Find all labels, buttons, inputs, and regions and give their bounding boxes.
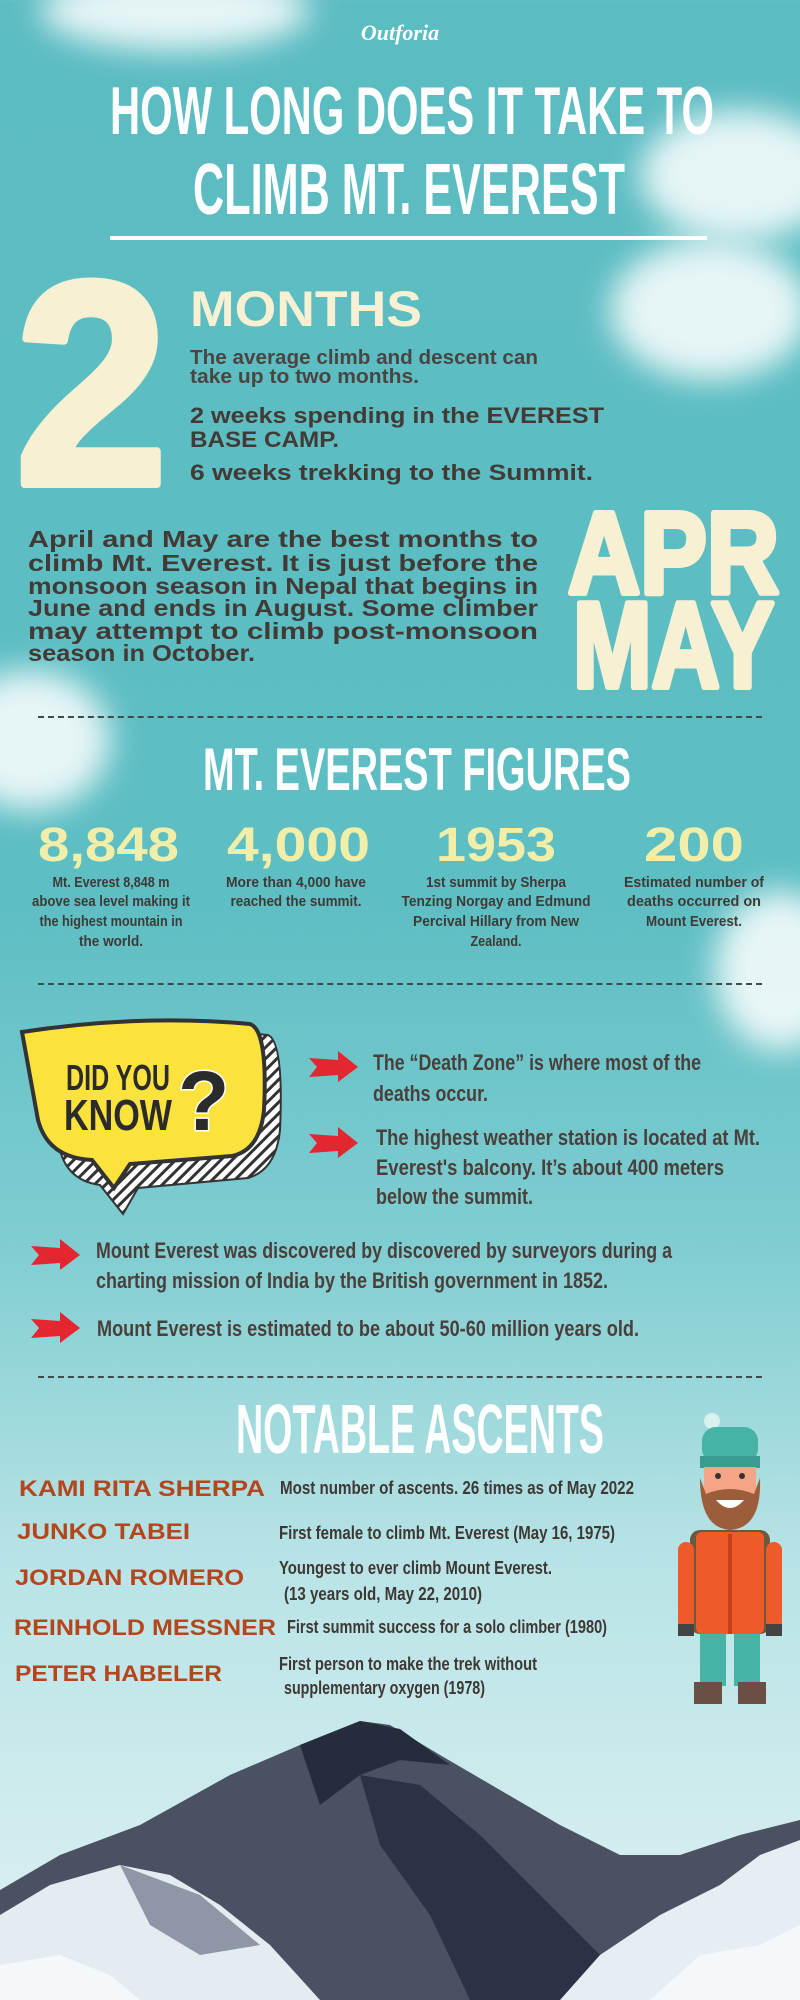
ascents list: KAMI RITA SHERPA — [19, 1476, 265, 1501]
logo: Outforia — [361, 20, 439, 45]
figures: More than 4,000 have — [226, 874, 366, 891]
bullets: below the summit. — [376, 1184, 533, 1209]
ascents list: First person to make the trek without — [279, 1654, 537, 1674]
bullets: The “Death Zone” is where most of the — [373, 1050, 701, 1075]
figures: 200 — [644, 819, 744, 872]
ascents list: Youngest to ever climb Mount Everest. — [279, 1558, 552, 1578]
figures: reached the summit. — [230, 893, 362, 910]
figures: the world. — [79, 933, 143, 950]
april paragraph: April and May are the best months to — [28, 526, 538, 552]
ascents list: REINHOLD MESSNER — [14, 1615, 276, 1640]
bullets: deaths occur. — [373, 1081, 488, 1106]
did you know bubble: DID YOU — [66, 1057, 170, 1098]
figures: Tenzing Norgay and Edmund — [402, 893, 590, 910]
figures: deaths occurred on — [627, 893, 761, 910]
hiker — [678, 1413, 782, 1704]
april paragraph: June and ends in August. Some climber — [28, 595, 538, 621]
bullets: Everest's balcony. It’s about 400 meters — [376, 1155, 724, 1180]
figures: Percival Hillary from New — [413, 913, 579, 930]
figures: 4,000 — [227, 819, 370, 872]
top section: 2 months and apr may: BASE CAMP. — [190, 427, 339, 452]
bullets: Mount Everest is estimated to be about 50-60 million years old. — [97, 1316, 639, 1341]
ascents list: supplementary oxygen (1978) — [284, 1678, 485, 1698]
figures: Mt. Everest 8,848 m — [52, 874, 170, 891]
figures — [32, 819, 765, 950]
top section: 2 months and apr may — [15, 250, 780, 700]
did you know bubble: KNOW — [64, 1091, 172, 1140]
ascents list — [14, 1476, 634, 1698]
top section: 2 months and apr may: take up to two months. — [190, 366, 419, 388]
bullets: charting mission of India by the British government in 1852. — [96, 1268, 608, 1293]
title — [110, 73, 714, 240]
ascents list: JUNKO TABEI — [17, 1519, 190, 1544]
figures: 1953 — [436, 819, 556, 872]
months: MONTHS — [190, 281, 422, 337]
figures: 1st summit by Sherpa — [426, 874, 567, 891]
figures: Mount Everest. — [646, 913, 742, 930]
ascents list: (13 years old, May 22, 2010) — [284, 1584, 482, 1604]
clouds — [0, 0, 800, 1070]
figures: Zealand. — [470, 933, 522, 950]
figures: Estimated number of — [624, 874, 765, 891]
mountain — [0, 1721, 800, 2000]
figures: above sea level making it — [32, 893, 190, 910]
did you know bubble — [20, 1018, 282, 1216]
april paragraph: season in October. — [28, 640, 255, 666]
ascents list: JORDAN ROMERO — [15, 1565, 244, 1590]
april paragraph: monsoon season in Nepal that begins in — [28, 573, 538, 599]
top section: 2 months and apr may: 6 weeks trekking to the Summit. — [190, 460, 593, 485]
bullets — [96, 1050, 760, 1341]
arrows — [31, 1051, 358, 1343]
april paragraph: may attempt to climb post-monsoon — [28, 618, 538, 644]
figures: the highest mountain in — [40, 913, 182, 930]
april paragraph: climb Mt. Everest. It is just before the — [28, 550, 538, 576]
ascents list: PETER HABELER — [15, 1661, 222, 1686]
did you know bubble: ? — [178, 1054, 229, 1148]
apr may — [568, 488, 779, 713]
top section: 2 months and apr may: 2 weeks spending in the EVEREST — [190, 403, 605, 428]
bullets: Mount Everest was discovered by discovered by surveyors during a — [96, 1238, 673, 1263]
figures: 8,848 — [38, 819, 179, 872]
top section: 2 months and apr may: The average climb and descent can — [190, 347, 538, 369]
april paragraph — [28, 526, 538, 666]
